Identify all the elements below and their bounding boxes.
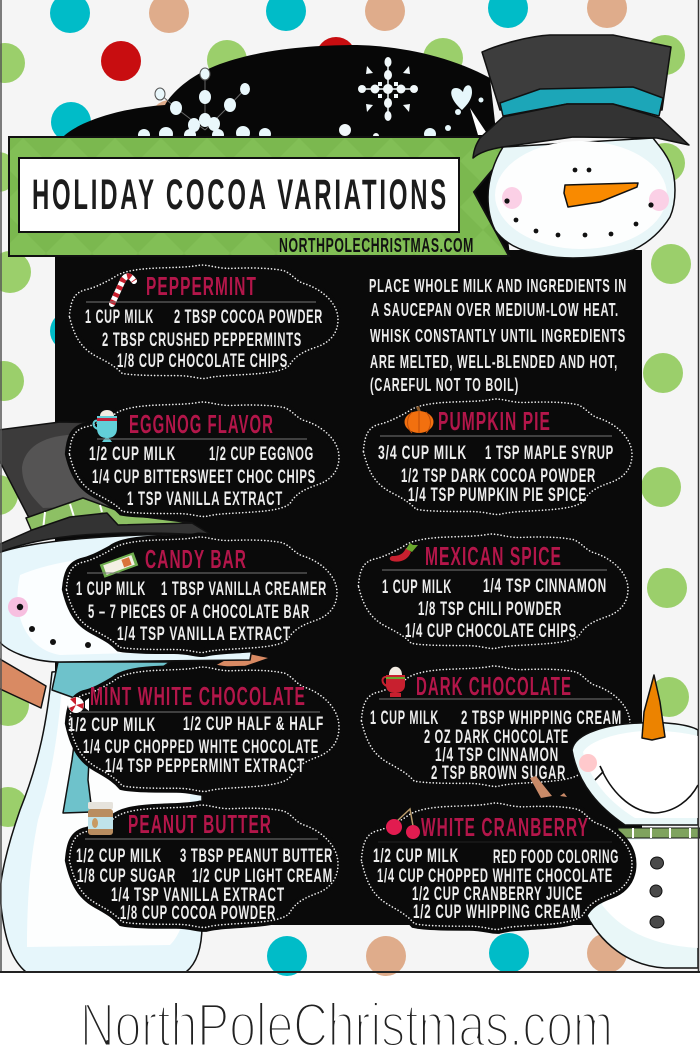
left arm (0, 658, 46, 708)
ingredients: mexican spice: 1/4 CUP CHOCOLATE CHIPS (405, 620, 577, 642)
icon: pumpkin (404, 406, 434, 433)
ingredients: eggnog flavor (89, 443, 316, 510)
ingredients: mint white chocolate: 1/2 CUP HALF & HALF (183, 713, 324, 735)
panel: mint white chocolate (62, 667, 339, 791)
ingredients: white cranberry: 1/2 CUP WHIPPING CREAM (413, 901, 581, 923)
icon: candy bar (100, 552, 138, 578)
carrot nose (642, 675, 665, 740)
heart ornament (424, 85, 488, 140)
ingredients: mint white chocolate (68, 713, 324, 777)
ingredients: candy bar (76, 578, 327, 645)
heading: mint white chocolate: MINT WHITE CHOCOLATE (90, 681, 306, 711)
ingredients: dark chocolate: 1 CUP MILK (370, 707, 439, 729)
snowman left body (0, 668, 202, 972)
instructions text: (CAREFUL NOT TO BOIL) (370, 374, 519, 395)
ingredients: pumpkin pie: 3/4 CUP MILK (378, 442, 467, 464)
ingredients: candy bar: 1 TBSP VANILLA CREAMER (161, 578, 327, 600)
ingredients: peanut butter: 1/2 CUP LIGHT CREAM (192, 865, 333, 887)
ingredients: white cranberry: 1/2 CUP MILK (373, 845, 459, 867)
ingredients: peppermint: 2 TBSP CRUSHED PEPPERMINTS (102, 329, 302, 351)
ingredients: candy bar: 5 – 7 PIECES OF A CHOCOLATE BAR (88, 601, 310, 623)
ingredients: peppermint: 2 TBSP COCOA POWDER (174, 306, 323, 328)
snowman right body (583, 832, 698, 968)
snowman top right (473, 35, 689, 258)
ingredients: peanut butter: 1/8 CUP COCOA POWDER (120, 902, 276, 924)
snowman left hat (0, 422, 213, 553)
title box (19, 158, 459, 232)
panel: peanut butter (69, 802, 338, 927)
black dome with snowflakes (60, 45, 510, 256)
snowflake right (339, 57, 418, 139)
snowflake left (138, 68, 271, 141)
ingredients: mint white chocolate: 1/4 TSP PEPPERMINT EXTRACT (105, 755, 305, 777)
smile (595, 766, 698, 813)
ingredients: eggnog flavor: 1/4 CUP BITTERSWEET CHOC CHIPS (92, 466, 316, 488)
snowman left (0, 422, 268, 972)
right arm stick (213, 652, 268, 667)
scarf band (618, 828, 700, 838)
ingredients: mint white chocolate: 1/4 CUP CHOPPED WHITE CHOCOLATE (83, 736, 319, 758)
eyes and smile (504, 168, 654, 237)
ingredients: dark chocolate: 1/4 TSP CINNAMON (435, 744, 559, 766)
ingredients: peanut butter: 3 TBSP PEANUT BUTTER (180, 845, 333, 867)
icon: peppermint candy (62, 697, 89, 713)
snowman head (488, 138, 675, 258)
cheek (579, 754, 597, 772)
ingredients: peppermint: 1 CUP MILK (85, 306, 154, 328)
ingredients: dark chocolate: 2 TSP BROWN SUGAR (431, 762, 566, 784)
ingredients: peanut butter (76, 845, 333, 924)
snowman left scarf (52, 662, 170, 813)
panel: dark chocolate (361, 666, 630, 786)
panel: candy bar (66, 537, 337, 652)
black chalkboard (55, 250, 642, 925)
ingredients: eggnog flavor: 1/2 CUP EGGNOG (209, 443, 314, 465)
ingredients: white cranberry: 1/2 CUP CRANBERRY JUICE (412, 883, 583, 905)
ingredients: peppermint: 1/8 CUP CHOCOLATE CHIPS (117, 350, 288, 372)
ingredients: peanut butter: 1/8 CUP SUGAR (77, 865, 176, 887)
ingredients: pumpkin pie (378, 442, 614, 506)
heading: peppermint: PEPPERMINT (146, 271, 257, 301)
ingredients: mexican spice: 1/4 TSP CINNAMON (483, 575, 607, 597)
ingredients: eggnog flavor: 1/2 CUP MILK (89, 443, 176, 465)
top hat (473, 35, 689, 158)
ingredients: mexican spice: 1/8 TSP CHILI POWDER (418, 598, 562, 620)
panel: eggnog flavor (69, 402, 339, 516)
ingredients: dark chocolate (370, 707, 622, 784)
heading: eggnog flavor: EGGNOG FLAVOR (129, 409, 274, 439)
icon: chili pepper (390, 543, 418, 562)
buttons (650, 857, 664, 928)
cheeks (502, 187, 669, 211)
heading: peanut butter: PEANUT BUTTER (128, 809, 272, 839)
ingredients: eggnog flavor: 1 TSP VANILLA EXTRACT (127, 488, 283, 510)
panel: pumpkin pie (363, 399, 632, 514)
arm stick right (530, 776, 567, 798)
ingredients: white cranberry (373, 845, 619, 923)
panel: mexican spice (358, 534, 628, 648)
ingredients: peanut butter: 1/2 CUP MILK (76, 845, 162, 867)
cheek and face (8, 597, 91, 648)
icon: candy cane (112, 276, 134, 304)
carrot nose (564, 183, 638, 207)
panel: peppermint (69, 265, 338, 378)
ingredients: mint white chocolate: 1/2 CUP MILK (68, 714, 156, 736)
ingredients: mexican spice (382, 575, 607, 642)
ingredients: pumpkin pie: 1/4 TSP PUMPKIN PIE SPICE (408, 484, 587, 506)
heading: candy bar: CANDY BAR (145, 544, 247, 574)
instructions text (369, 275, 627, 395)
panel: white cranberry (361, 803, 632, 929)
heading: white cranberry: WHITE CRANBERRY (421, 812, 589, 842)
title banner (9, 137, 520, 257)
ingredients: dark chocolate: 2 OZ DARK CHOCOLATE (424, 726, 569, 748)
heading: dark chocolate: DARK CHOCOLATE (416, 671, 572, 701)
ingredients: peanut butter: 1/4 TSP VANILLA EXTRACT (111, 884, 285, 906)
heading: mexican spice: MEXICAN SPICE (425, 541, 562, 571)
snowman left head (0, 535, 260, 662)
snowman right head (572, 722, 698, 825)
icon: cherries (386, 809, 420, 839)
ingredients: peppermint (85, 306, 323, 372)
banner website: NORTHPOLECHRISTMAS.COM (279, 235, 474, 257)
icon: red mug (382, 667, 405, 697)
snowman right (572, 675, 700, 968)
icon: peanut butter jar (88, 802, 113, 835)
heading: pumpkin pie: PUMPKIN PIE (438, 406, 551, 436)
ingredients: candy bar: 1/4 TSP VANILLA EXTRACT (117, 623, 291, 645)
ingredients: candy bar: 1 CUP MILK (76, 578, 146, 600)
ingredients: mexican spice: 1 CUP MILK (382, 576, 452, 598)
icon: teal mug (93, 410, 117, 442)
